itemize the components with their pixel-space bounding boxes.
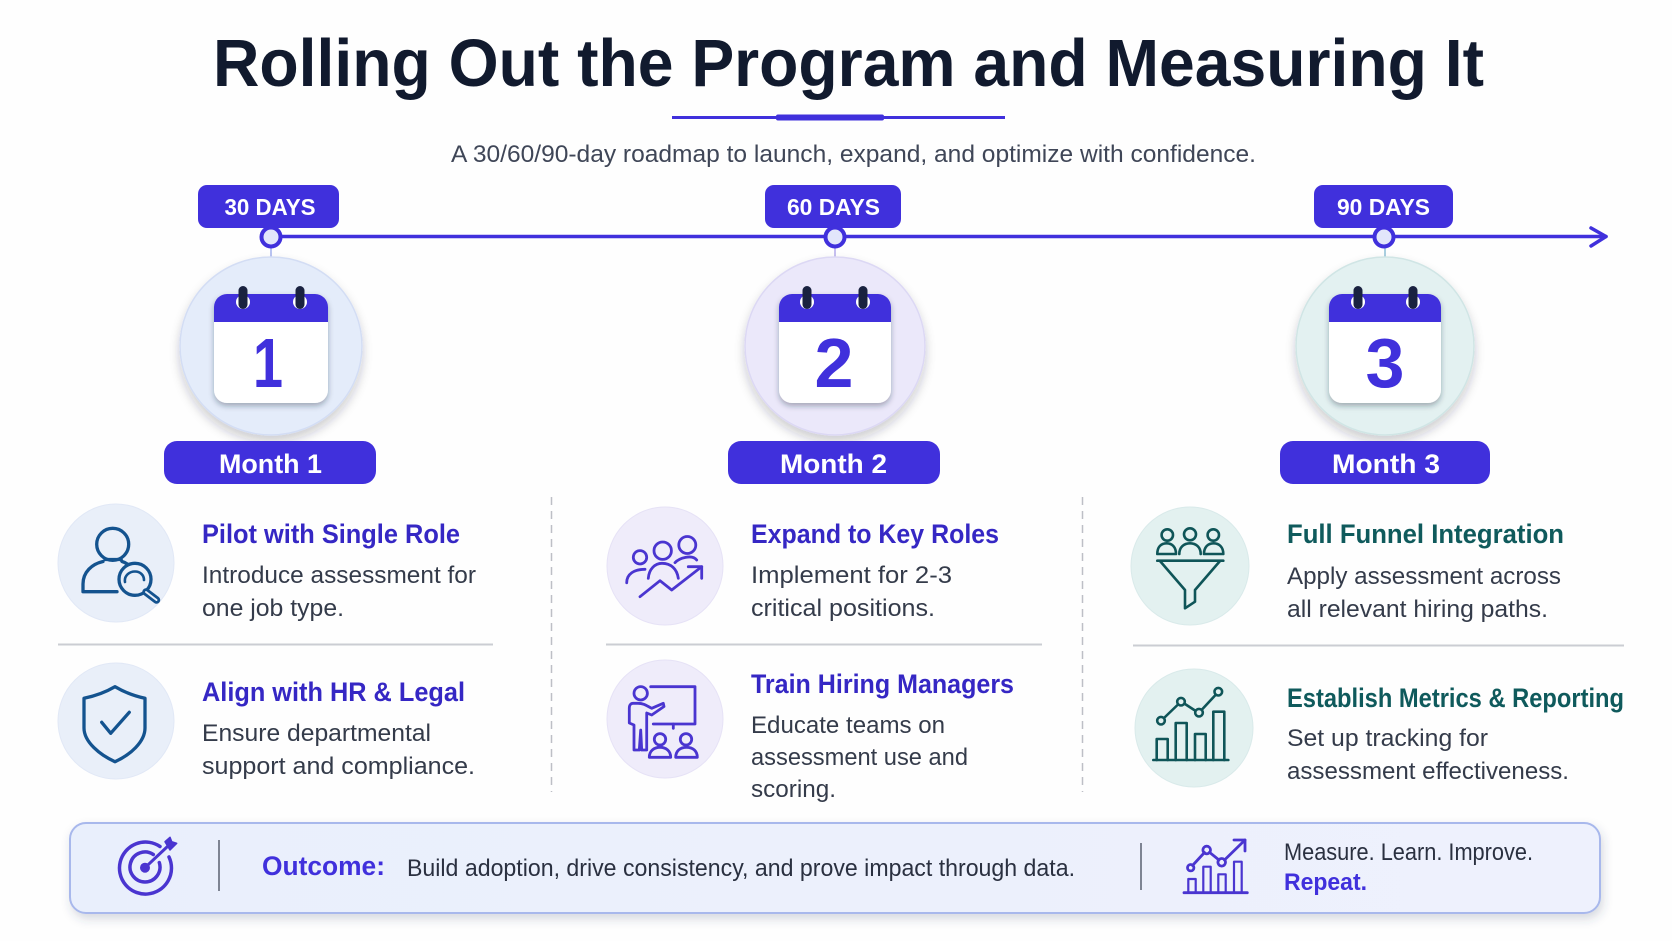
measure text — [1284, 839, 1533, 896]
month 2 calendar badge — [745, 257, 925, 435]
task: align with hr and legal: support and compliance. — [202, 753, 475, 780]
task: train hiring managers: scoring. — [751, 776, 836, 803]
month 1 pill: Month 1 — [219, 449, 322, 479]
icon: target with dart — [119, 837, 177, 894]
icon: presenter at board — [607, 660, 723, 778]
task: full funnel integration — [1131, 507, 1564, 625]
task: establish metrics and reporting: Set up tracking for — [1287, 725, 1488, 752]
timeline axis arrow — [272, 228, 1606, 246]
month 3 pill: Month 3 — [1332, 449, 1440, 479]
task: pilot with single role: Introduce assessment for — [202, 562, 476, 589]
task: align with hr and legal — [58, 663, 475, 780]
icon: bar chart with trend — [1135, 669, 1253, 787]
task: full funnel integration: all relevant hiring paths. — [1287, 596, 1548, 623]
task: pilot with single role — [58, 504, 476, 622]
month 2 calendar badge: 2 — [815, 324, 853, 402]
subtitle: A 30/60/90-day roadmap to launch, expand, and optimize with confidence. — [451, 141, 1256, 168]
task: expand to key roles: Expand to Key Roles — [751, 519, 999, 549]
month 2 pill: Month 2 — [780, 449, 887, 479]
marker: 90 days — [1314, 185, 1453, 257]
marker: 90 days: 90 DAYS — [1337, 194, 1430, 220]
icon: person with magnifier — [58, 504, 174, 622]
task: full funnel integration: Full Funnel Integration — [1287, 519, 1564, 549]
marker: 60 days: 60 DAYS — [787, 194, 880, 220]
outcome text: Build adoption, drive consistency, and prove impact through data. — [407, 855, 1075, 882]
icon: group with rising arrow — [607, 507, 723, 625]
task: train hiring managers — [607, 660, 1014, 803]
marker: 60 days — [765, 185, 901, 257]
task: train hiring managers: Educate teams on — [751, 712, 945, 739]
month 1 calendar badge: 1 — [253, 324, 283, 402]
task: align with hr and legal: Align with HR & Legal — [202, 677, 465, 707]
panel: month 2 tasks — [607, 507, 1014, 803]
month 3 calendar badge: 3 — [1366, 324, 1404, 402]
measure text: Measure. Learn. Improve. — [1284, 839, 1533, 866]
task: expand to key roles — [607, 507, 999, 625]
task: pilot with single role: Pilot with Single Role — [202, 519, 460, 549]
icon: people funnel — [1131, 507, 1249, 625]
task: train hiring managers: assessment use and — [751, 744, 968, 771]
month 2 pill — [728, 441, 940, 484]
outcome label: Outcome: — [262, 851, 385, 881]
month 3 calendar badge — [1296, 257, 1474, 435]
marker: 30 days: 30 DAYS — [224, 194, 316, 220]
task: expand to key roles: critical positions. — [751, 595, 935, 622]
month 1 pill — [164, 441, 376, 484]
task: expand to key roles: Implement for 2-3 — [751, 562, 952, 589]
outcome panel — [70, 823, 1600, 913]
icon: growth chart — [1184, 840, 1247, 893]
task: align with hr and legal: Ensure departmental — [202, 720, 431, 747]
task: full funnel integration: Apply assessment across — [1287, 563, 1561, 590]
panel: month 3 tasks — [1131, 507, 1624, 787]
panel: month 1 tasks — [58, 504, 476, 780]
task: establish metrics and reporting: assessment effectiveness. — [1287, 758, 1569, 785]
month 3 pill — [1280, 441, 1490, 484]
marker: 30 days — [198, 185, 339, 257]
title: Rolling Out the Program and Measuring It — [213, 26, 1484, 101]
measure text: Repeat. — [1284, 869, 1367, 896]
task: establish metrics and reporting — [1135, 669, 1624, 787]
month 1 calendar badge — [180, 257, 362, 435]
icon: shield check — [58, 663, 174, 779]
task: pilot with single role: one job type. — [202, 595, 344, 622]
timeline — [198, 185, 1606, 257]
title underline — [672, 114, 1005, 120]
task: establish metrics and reporting: Establish Metrics & Reporting — [1287, 683, 1624, 713]
task: train hiring managers: Train Hiring Managers — [751, 669, 1014, 699]
